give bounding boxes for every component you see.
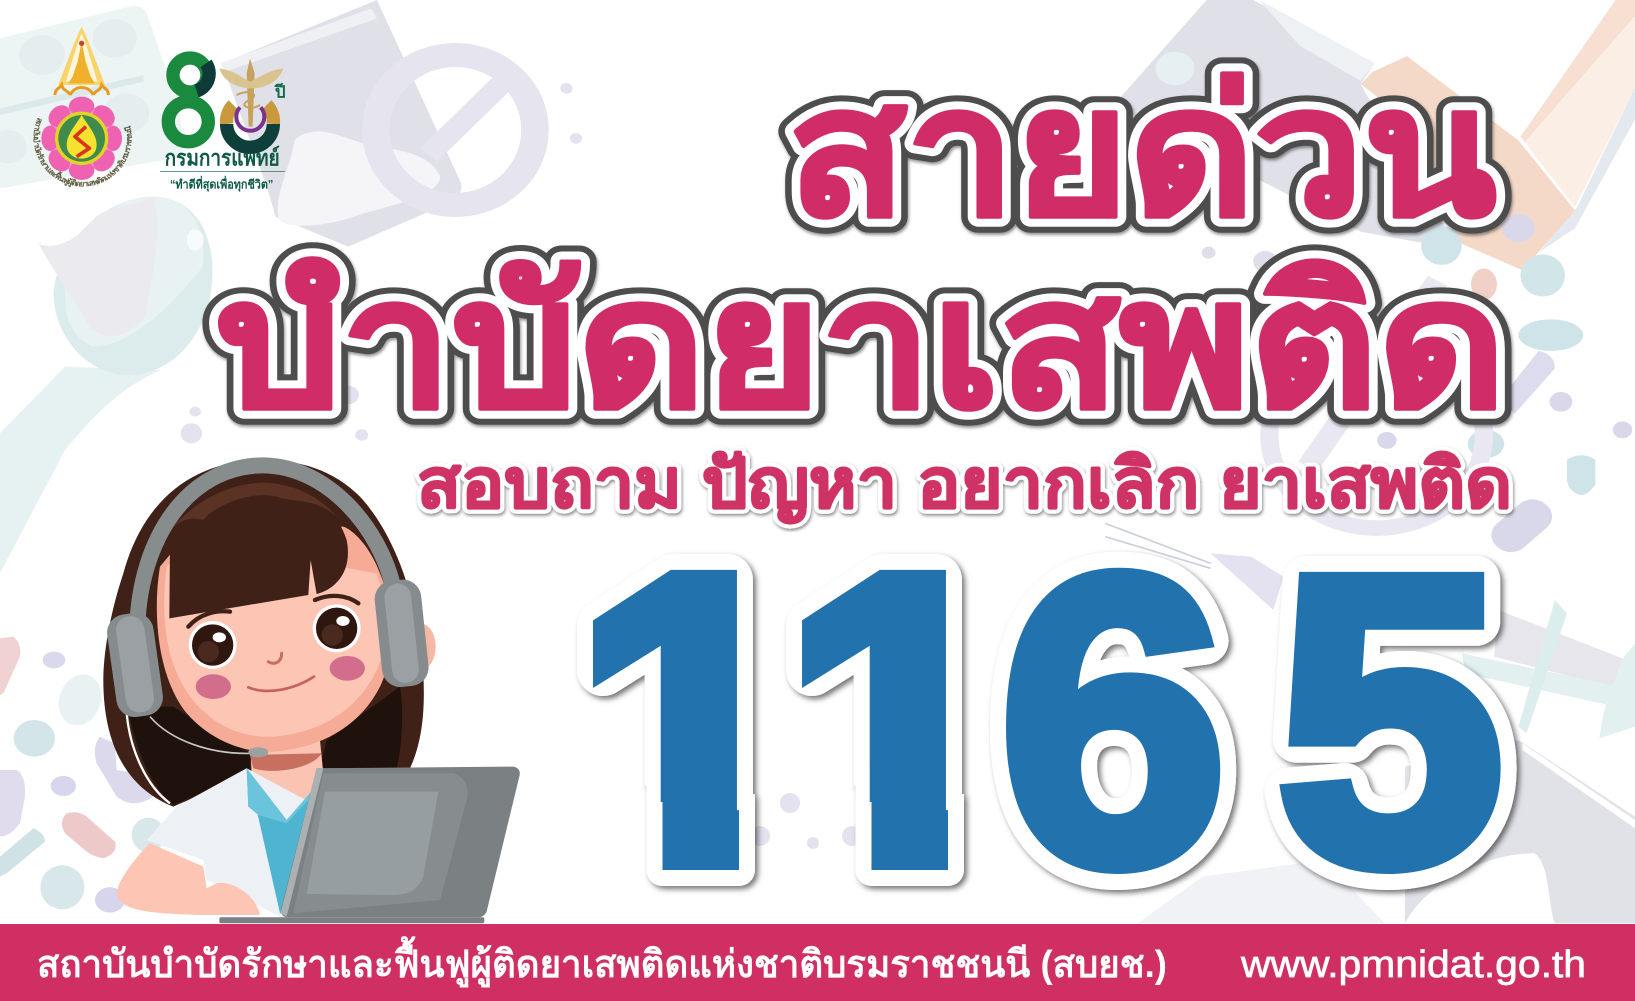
scrubs (247, 768, 310, 913)
laptop base (219, 917, 484, 923)
bangs (169, 482, 348, 618)
headset ear cups (105, 611, 165, 719)
nose and mouth (268, 653, 282, 663)
footer website: www.pmnidat.go.th (1240, 944, 1586, 986)
footer band (0, 924, 1635, 1001)
pill bag left (220, 0, 461, 247)
prohibition sign right (1269, 281, 1484, 528)
syringe (1105, 523, 1635, 738)
hotline number 1165 (576, 550, 1524, 898)
numeral 8 (168, 58, 209, 142)
prohibition sign left (376, 55, 535, 205)
blister pack (0, 6, 184, 188)
pills right (1202, 214, 1632, 559)
emblem lotus (41, 97, 122, 180)
eyes (189, 621, 237, 669)
ear (408, 624, 436, 669)
microphone (150, 717, 253, 753)
pills lower left (0, 637, 165, 913)
logo: institute emblem (33, 26, 132, 188)
logo: Department of Medical Services 80 years (160, 58, 286, 192)
neck (250, 740, 323, 820)
hair back (103, 460, 424, 807)
dots between digits (750, 793, 862, 849)
pill bag right (1113, 0, 1458, 249)
subtitle: สอบถาม ปัญหา อยากเลิก ยาเสพติด (417, 446, 1512, 524)
arm and hand (117, 843, 260, 915)
coat (147, 768, 318, 917)
hotline number 1165: 11 (575, 491, 1012, 949)
motto: “ทำดีที่สุดเพื่อทุกชีวิต” (170, 175, 273, 192)
year label: ปี (274, 82, 286, 101)
footer organisation name: สถาบันบำบัดรักษาและฟื้นฟูผู้ติดยาเสพติดแห่งชาติบรมราชชนนี (สบยช.) (37, 936, 1167, 988)
hotline number 1165: 65 (999, 491, 1504, 949)
spoon with powder (0, 197, 213, 573)
caduceus (247, 58, 255, 127)
emblem spire (55, 27, 108, 95)
hand and arm (1360, 0, 1635, 270)
cheeks (196, 674, 231, 699)
laptop lid (281, 767, 520, 917)
face (157, 527, 391, 752)
lower-right gray bag and hand (1138, 740, 1635, 923)
character: call-centre doctor with headset (103, 460, 520, 923)
headset band (137, 465, 394, 627)
eyebrows (188, 596, 358, 627)
title line 2: บำบัดยาเสพติด (216, 245, 1506, 444)
numeral 0 with gold (227, 105, 273, 147)
emblem ring text: สถาบันบำบัดรักษาและฟื้นฟูผู้ติดยาเสพติดแห่งชาติบรมราชชนนี (33, 118, 132, 188)
title line 1: สายด่วน (788, 53, 1496, 252)
department name: กรมการแพทย์ (165, 145, 280, 170)
dots left (181, 83, 582, 443)
